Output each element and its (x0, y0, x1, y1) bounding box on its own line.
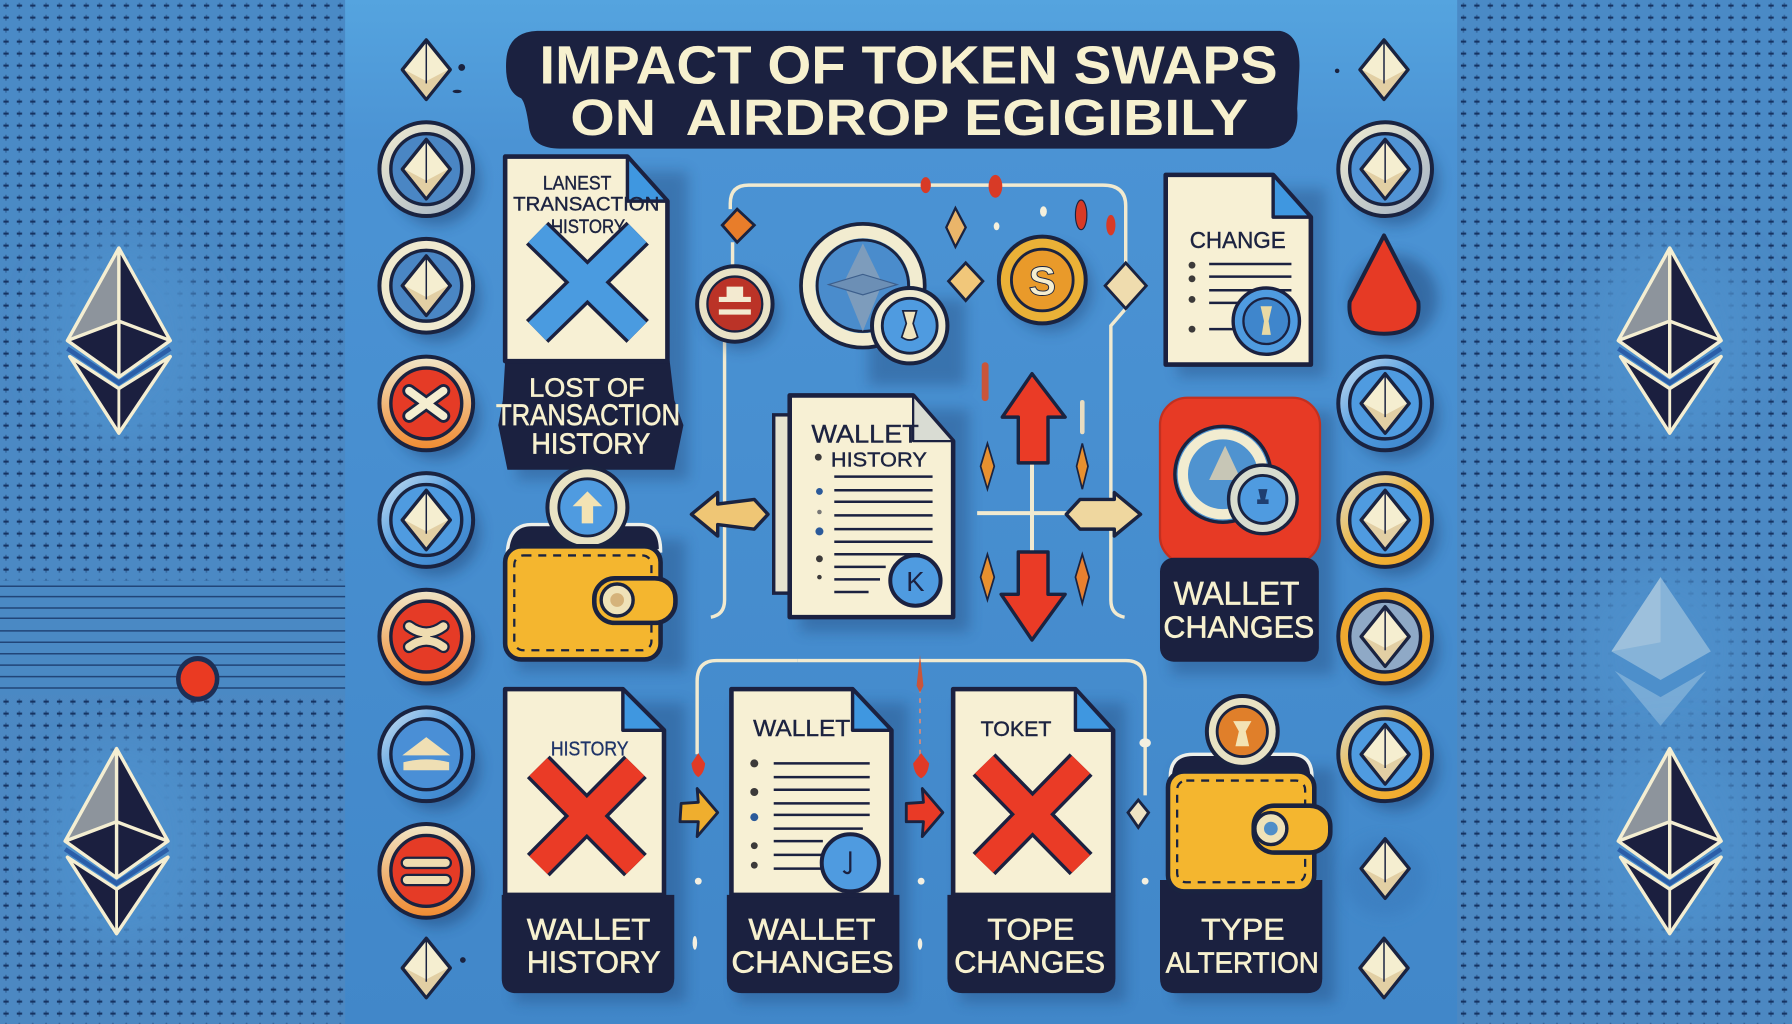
connector: lower bracket (697, 661, 1145, 795)
marker: red drop middle (913, 753, 929, 778)
title banner: IMPACT OF TOKEN SWAPS (539, 35, 1278, 95)
label box (502, 895, 674, 993)
title banner (506, 31, 1299, 149)
panel: wallet history document (774, 395, 953, 617)
background: central panel (345, 0, 1457, 1024)
document (505, 157, 667, 361)
icon: cream diamond (1105, 263, 1146, 309)
label text: WALLET (1174, 576, 1299, 612)
panel: type alteration card (1160, 696, 1330, 993)
label box (1160, 558, 1319, 662)
blue cross (537, 233, 638, 331)
label text: WALLET (749, 913, 875, 946)
arrows: center cross (691, 366, 1141, 640)
doc heading: TOKET (981, 716, 1051, 741)
icon: tan small diamond (946, 208, 966, 247)
icon: red drop (1349, 235, 1438, 342)
icon: large ethereum ring with key coin (801, 224, 947, 363)
icon: bottom diamond (402, 938, 466, 998)
icon: gold dollar coin (999, 237, 1093, 331)
connector: upper bracket (711, 185, 1126, 617)
page fold (623, 689, 664, 730)
panel: lost of transaction history: HISTORY (551, 216, 625, 238)
background: left side panel (0, 0, 345, 1024)
panel: lost of transaction history: TRANSACTION (496, 399, 680, 432)
page fold (627, 157, 667, 201)
coin (822, 834, 879, 891)
red app icon (1160, 398, 1320, 563)
right icon column (1335, 40, 1439, 998)
label box (727, 895, 899, 993)
panel: wallet changes card (727, 689, 899, 993)
icon: tan diamond (949, 263, 983, 301)
label text: TYPE (1201, 913, 1285, 946)
list lines (750, 759, 870, 869)
icon: large ethereum right top (1584, 238, 1755, 443)
arrow: red up (1002, 374, 1065, 463)
doc heading: HISTORY (551, 737, 629, 760)
document (953, 689, 1113, 895)
page fold (1273, 175, 1311, 217)
icon: bottom diamond (1360, 938, 1408, 998)
document (505, 689, 664, 895)
upper flow decorations (722, 175, 1146, 309)
wallet back (1170, 754, 1312, 777)
label text: LOST OF (529, 373, 645, 403)
page fold (853, 689, 891, 730)
list lines (1189, 262, 1291, 333)
icon: red coin (697, 266, 779, 350)
panel: lost of transaction history (496, 157, 683, 470)
list lines (815, 454, 933, 592)
marker: white dots (693, 738, 1151, 950)
label text: TOPE (987, 913, 1074, 946)
panel: wallet changes (1160, 398, 1320, 662)
label text: WALLET (527, 913, 650, 946)
icon: ethereum coin 2 (379, 239, 480, 342)
icon: ethereum coin 4 (1338, 590, 1439, 693)
marker: red drop 1 (921, 177, 931, 193)
icon: blue arrow coin (379, 707, 480, 810)
marker: white dot 2 (994, 222, 999, 230)
wallet body (1168, 771, 1314, 891)
icon: small diamond (1128, 800, 1149, 827)
panel: wallet changes card: CHANGES (731, 945, 894, 980)
title banner: ON AIRDROP EGIGIBILY (570, 88, 1248, 146)
left decorative stripes and red dot (0, 581, 345, 702)
panel: wallet changes: CHANGES (1163, 610, 1314, 645)
coin K (890, 555, 941, 606)
icon: orange diamond (722, 209, 754, 242)
marker: red drop 2 (989, 175, 1002, 198)
arrow: red right (906, 789, 943, 837)
label box (947, 895, 1115, 993)
coin K: K (906, 566, 925, 597)
icon: diamond with halo (1344, 839, 1426, 917)
panel: wallet history document: HISTORY (831, 448, 927, 471)
coin (1233, 288, 1299, 354)
icon: ethereum coin 3 (1338, 473, 1439, 576)
ring (1175, 426, 1271, 522)
document (731, 689, 891, 895)
red cross (984, 765, 1081, 864)
icon: red cross coin 2 (379, 590, 480, 693)
red cross (538, 767, 635, 865)
panel: lost of transaction history: TRANSACTION (513, 193, 659, 215)
icon: large ethereum left top (43, 238, 208, 443)
icon: top diamond (402, 40, 465, 99)
icon: ethereum coin 1 (379, 122, 480, 225)
background: right side panel (1457, 0, 1792, 1024)
wallet clasp (1254, 806, 1330, 853)
lower flow markers (680, 655, 1151, 950)
icon: ethereum coin 2 (1338, 357, 1439, 459)
coin (1207, 696, 1278, 767)
icon: yellow wallet left (505, 467, 675, 659)
icon: ethereum coin 3 (379, 473, 480, 576)
panel: type changes card: CHANGES (954, 945, 1105, 980)
icon: pale ethereum right (1581, 566, 1741, 737)
page fold (1075, 689, 1113, 730)
icon: large ethereum right bottom (1584, 738, 1755, 944)
arrow: tan left (691, 493, 768, 536)
marker: red centre tick (917, 655, 923, 693)
arrow: orange right (680, 789, 718, 837)
icon: red cross coin 1 (379, 357, 480, 459)
doc heading: WALLET (753, 715, 850, 741)
panel: wallet history card: HISTORY (527, 945, 661, 980)
marker: white dot 1 (1040, 206, 1047, 217)
label box (1160, 880, 1322, 993)
arrow: red down (1001, 552, 1065, 640)
icon: large ethereum left bottom (41, 738, 206, 944)
icon: gold dollar coin: S (1029, 258, 1056, 304)
panel: change document (1166, 175, 1311, 365)
marker: red dash 2 (1106, 215, 1115, 235)
panel: type alteration card: ALTERTION (1166, 948, 1319, 980)
doc heading: WALLET (811, 420, 919, 448)
icon: ethereum coin 5 (1338, 707, 1439, 810)
doc heading: CHANGE (1190, 227, 1286, 253)
markers (982, 366, 988, 398)
marker: red drop left (691, 753, 705, 777)
coin (1229, 465, 1297, 534)
back page (774, 415, 808, 593)
icon: top diamond (1335, 40, 1408, 99)
left icon column (379, 40, 480, 998)
icon: ethereum coin 1 (1338, 122, 1439, 225)
doc heading: LANEST (543, 173, 612, 195)
arrow: tan right (1066, 493, 1141, 536)
page fold (913, 395, 953, 441)
label box (498, 361, 683, 470)
icon: red cross coin 3 (379, 824, 480, 927)
panel: lost of transaction history: HISTORY (531, 429, 650, 461)
panel: wallet history card (502, 689, 674, 993)
marker: red dash 1 (1075, 200, 1087, 230)
panel: type changes card (947, 689, 1115, 993)
